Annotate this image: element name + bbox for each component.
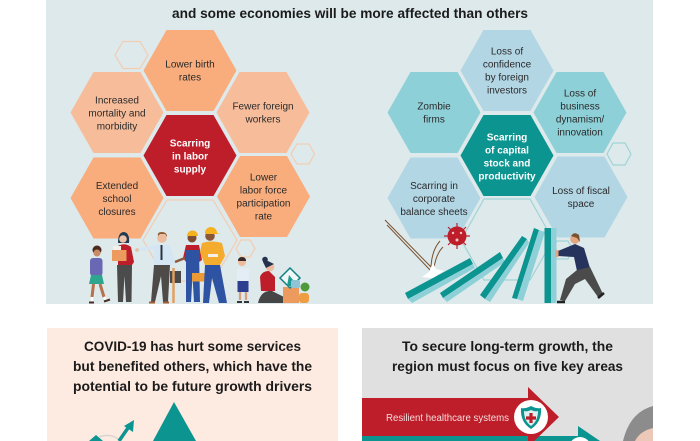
hexagon: zombie firms: firms	[423, 114, 445, 126]
hexagon: scarring in labor supply	[144, 115, 236, 196]
hexagon: loss of business dynamism: business	[560, 102, 600, 112]
hexagon: corporate balance sheets	[388, 158, 480, 238]
heading: scarring: and some economies will be more affected than others	[172, 5, 528, 21]
chart: growth triangles and arrow	[89, 402, 196, 441]
panel: services	[47, 328, 338, 441]
hexagon: extended school closures	[70, 158, 164, 238]
hexagon: loss of confidence: investors	[487, 86, 527, 96]
hexagon: loss of business dynamism: Loss of	[564, 88, 596, 100]
hexagon: scarring of capital stock: stock and	[484, 158, 530, 170]
heading: covid services	[73, 338, 312, 394]
icon: medical shield	[521, 406, 541, 429]
hexagon: loss of confidence: confidence	[483, 60, 532, 70]
hexagon: loss of business dynamism: innovation	[557, 128, 603, 138]
figure: man in shirt and tie	[135, 232, 181, 303]
domino 4	[512, 228, 545, 301]
hexagon: fewer foreign workers: Fewer foreign	[232, 102, 294, 112]
figure: sitting woman with belongings	[258, 257, 310, 303]
figure: worker with overalls	[175, 230, 204, 302]
hexagon: extended school closures: Extended	[96, 181, 138, 192]
hexagon: lower participation: participation	[237, 198, 290, 210]
domino 3	[480, 236, 529, 302]
figure: head at right edge	[623, 406, 653, 441]
hexagon: loss of confidence: by foreign	[485, 72, 529, 84]
hexagon: increased mortality: morbidity	[97, 122, 137, 132]
hexagon: lower birth rates	[144, 30, 236, 111]
domino 2	[440, 252, 505, 302]
figure: worker in yellow	[200, 227, 227, 303]
figure: woman with box	[112, 232, 134, 302]
hexagon: loss of fiscal space	[534, 156, 628, 238]
domino 1	[405, 258, 475, 303]
hexagon: lower participation: rate	[255, 212, 273, 222]
hexagon: loss of confidence	[460, 30, 554, 111]
hexagon: increased mortality	[70, 72, 164, 153]
hexagon: extended school closures: closures	[98, 207, 136, 218]
hexagon: scarring of capital stock: Scarring	[487, 132, 527, 144]
hexagon: corporate balance sheets: corporate	[413, 194, 456, 205]
hexagon: lower participation	[217, 156, 310, 237]
figure: man pushing domino	[556, 233, 604, 302]
hexagon: scarring in labor supply: in labor	[172, 152, 208, 162]
figure: boy	[237, 257, 249, 302]
hexagon: lower participation: labor force	[240, 186, 288, 196]
hexagon: lower birth rates: Lower birth	[165, 60, 215, 70]
capital stock hexagon cluster	[388, 30, 631, 280]
hexagon: zombie firms	[388, 72, 480, 153]
hexagon: scarring in labor supply: supply	[174, 164, 207, 176]
hexagon: zombie firms: Zombie	[417, 102, 451, 112]
hexagon: loss of fiscal space: space	[568, 199, 595, 210]
hexagon: fewer foreign workers: workers	[244, 114, 281, 126]
hexagon: loss of business dynamism: dynamism/	[556, 114, 604, 126]
hexagon: scarring of capital stock: productivity	[478, 172, 536, 182]
illustration: people affected	[89, 227, 310, 303]
panel: scarring effects	[46, 0, 653, 304]
panel: five key areas	[362, 328, 653, 441]
hexagon: corporate balance sheets: Scarring in	[410, 181, 458, 192]
hexagon: lower participation: Lower	[250, 172, 278, 184]
heading: covid services: COVID-19 has hurt some services	[84, 338, 301, 354]
domino 5 standing	[544, 228, 556, 303]
hexagon: loss of confidence: Loss of	[491, 46, 523, 58]
label: resilient healthcare systems: Resilient healthcare systems	[386, 413, 509, 424]
figure: girl	[89, 246, 110, 302]
heading: five key areas	[392, 338, 623, 374]
hexagon: fewer foreign workers	[216, 72, 310, 153]
hexagon: lower birth rates: rates	[179, 72, 201, 84]
heading: five key areas: region must focus on five key areas	[392, 358, 623, 374]
hexagon: loss of fiscal space: Loss of fiscal	[552, 186, 610, 197]
heading: covid services: potential to be future growth drivers	[73, 378, 312, 394]
illustration: falling dominoes	[385, 220, 604, 303]
hexagon: increased mortality: mortality and	[88, 108, 146, 120]
hexagon: increased mortality: Increased	[95, 96, 139, 106]
arrow: resilient healthcare systems	[362, 387, 559, 441]
hexagon: scarring of capital stock	[460, 115, 554, 196]
heading: five key areas: To secure long-term growth, the	[402, 338, 613, 354]
heading: covid services: but benefited others, which have the	[73, 358, 312, 374]
hexagon: scarring in labor supply: Scarring	[170, 138, 210, 150]
icon: virus	[444, 223, 470, 249]
labor supply hexagon cluster	[70, 30, 314, 281]
icon: impact lines	[385, 220, 444, 283]
hexagon: scarring of capital stock: of capital	[485, 146, 529, 156]
hexagon: corporate balance sheets: balance sheets	[400, 207, 468, 218]
hexagon: loss of business dynamism	[534, 72, 626, 153]
hexagon: extended school closures: school	[103, 194, 131, 205]
arrow: digital teal	[362, 426, 600, 441]
